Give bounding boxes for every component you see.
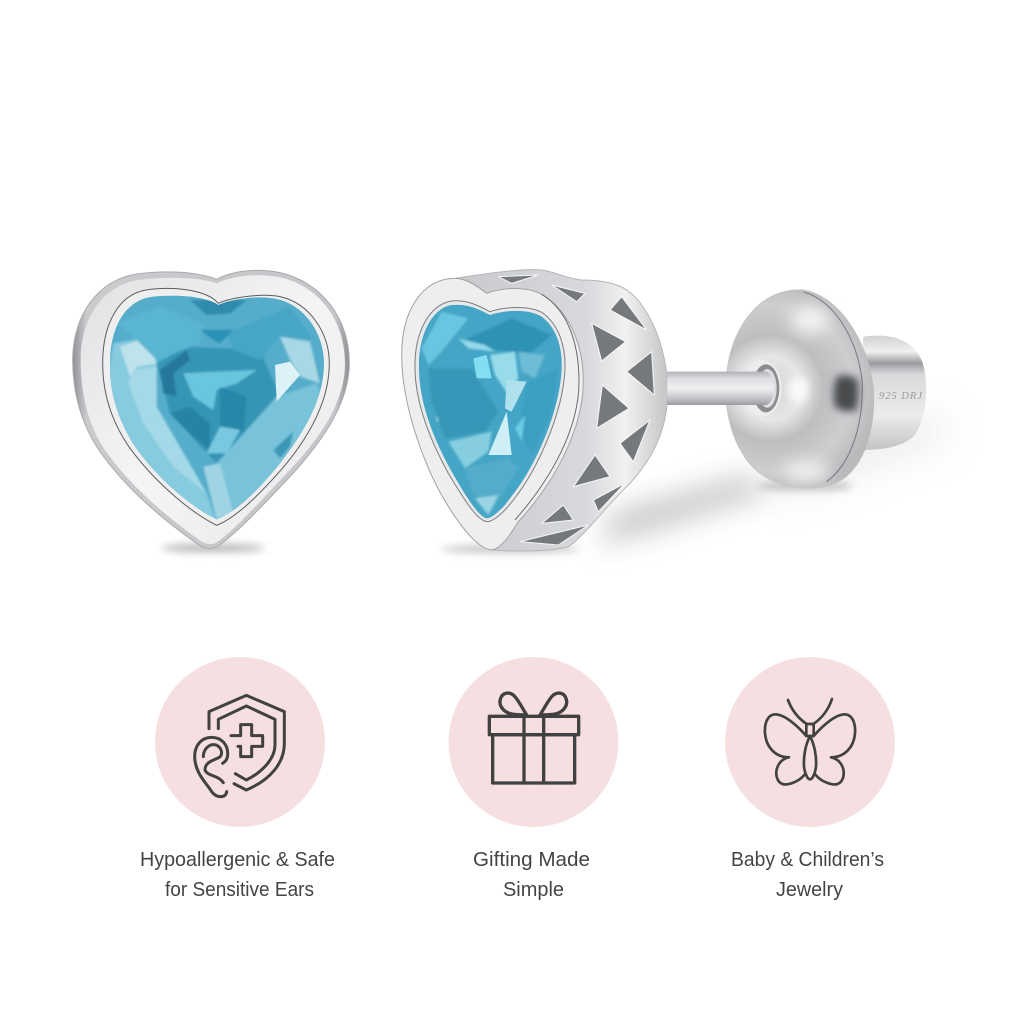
cast shadow of right earring [440, 418, 950, 553]
pink circle [448, 657, 618, 827]
screw back barrel [857, 336, 926, 450]
icon: ear and shield with cross [195, 695, 284, 797]
gem seat [415, 301, 565, 522]
gallery openings [498, 275, 654, 545]
shadow under left earring [161, 544, 265, 552]
disc bright lower sheen [783, 462, 830, 481]
front bezel [402, 278, 583, 550]
blue gem [110, 296, 324, 520]
right earring: three-quarter view [402, 270, 668, 551]
post collar [667, 360, 782, 417]
metal bezel rim [73, 270, 349, 548]
disc highlight [788, 377, 808, 403]
bezel edge shading [515, 294, 579, 520]
gem seat [103, 288, 329, 525]
stamp: 925 DRJ: 925 DRJ [879, 391, 923, 402]
label line 2: jewelry: Jewelry [776, 878, 844, 901]
label line 2: gifting: Simple [503, 878, 564, 901]
icon: gift box [489, 693, 579, 783]
left earring: front view heart [73, 270, 349, 548]
label: Gifting Made [473, 848, 590, 871]
disc dark reflection [834, 375, 858, 411]
icon: butterfly [765, 699, 855, 784]
disc bright top sheen [790, 307, 830, 333]
earring post and screw back [667, 290, 926, 488]
bezel band [81, 275, 345, 544]
feature: baby and children's jewelry [725, 657, 895, 871]
label line 2: hypoallergenic: for Sensitive Ears [165, 878, 314, 901]
feature: gifting [448, 657, 618, 871]
post [667, 372, 774, 405]
pink circle [155, 657, 325, 827]
facet highlights [473, 355, 527, 455]
infographic canvas [72, 269, 934, 900]
disc flange line [803, 292, 862, 482]
facet highlight [275, 362, 300, 402]
label: Baby & Children’s [731, 848, 884, 871]
pink circle [725, 657, 895, 827]
label: Hypoallergenic & Safe [140, 848, 335, 871]
gallery body [455, 270, 668, 551]
blue gem [415, 302, 568, 522]
screw back disc [726, 290, 874, 488]
feature: hypoallergenic [140, 657, 335, 871]
